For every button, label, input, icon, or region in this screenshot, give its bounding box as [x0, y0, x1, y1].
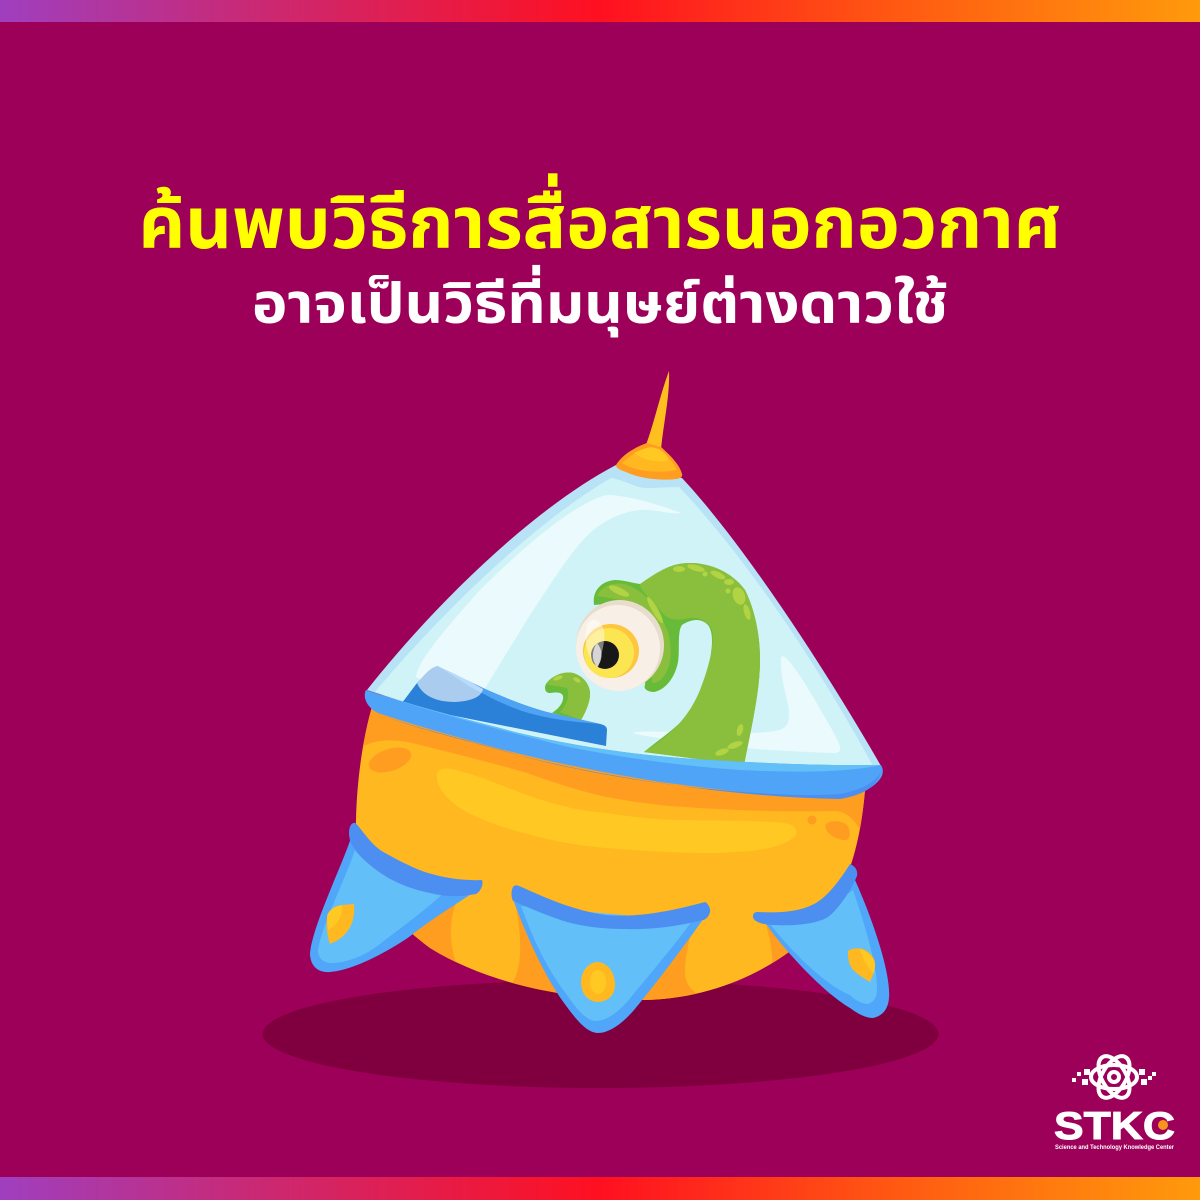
- center pod: [512, 885, 710, 1033]
- antenna: [616, 371, 682, 480]
- bottom gradient bar: [0, 1177, 1200, 1200]
- alien tentacle arm: [594, 563, 760, 765]
- pod spot: [848, 948, 875, 982]
- dome rim: [365, 690, 883, 799]
- pod collar: [512, 885, 710, 929]
- alien: [545, 563, 760, 765]
- dome highlight left: [416, 495, 681, 692]
- top gradient bar: [0, 0, 1200, 22]
- body spots: [366, 743, 414, 777]
- pod spot: [581, 962, 615, 1002]
- illustration: alien spaceship: [310, 371, 889, 1033]
- glass dome: [367, 465, 881, 770]
- subtitle: อาจเป็นวิธีที่มนุษย์ต่างดาวใช้: [252, 264, 948, 338]
- logo orange dot: [1158, 1120, 1168, 1130]
- left pod: [310, 823, 483, 972]
- ground shadow: [262, 980, 938, 1088]
- logo atom icon: [1091, 1051, 1137, 1103]
- title: ค้นพบวิธีการสื่อสารนอกอวกาศ: [138, 173, 1062, 264]
- logo pixel squares: [1072, 1069, 1156, 1085]
- shade lobes between pods: [412, 904, 456, 962]
- pod collar: [349, 823, 483, 896]
- pod spot: [327, 904, 354, 944]
- dome highlight right: [633, 656, 840, 753]
- right pod: [753, 864, 889, 1018]
- body shade band: [363, 708, 865, 829]
- body highlight: [437, 768, 797, 853]
- alien skin spots: [608, 563, 752, 757]
- logo tagline: Science and Technology Knowledge Center: [1055, 1145, 1175, 1151]
- ship body: [356, 708, 865, 1000]
- control console: [400, 666, 607, 746]
- logo wordmark: STKC: [1054, 1105, 1175, 1148]
- pod collar: [753, 864, 857, 925]
- logo: STKC: [1054, 1051, 1175, 1151]
- alien eye: [569, 593, 671, 698]
- small alien tentacle: [545, 672, 590, 720]
